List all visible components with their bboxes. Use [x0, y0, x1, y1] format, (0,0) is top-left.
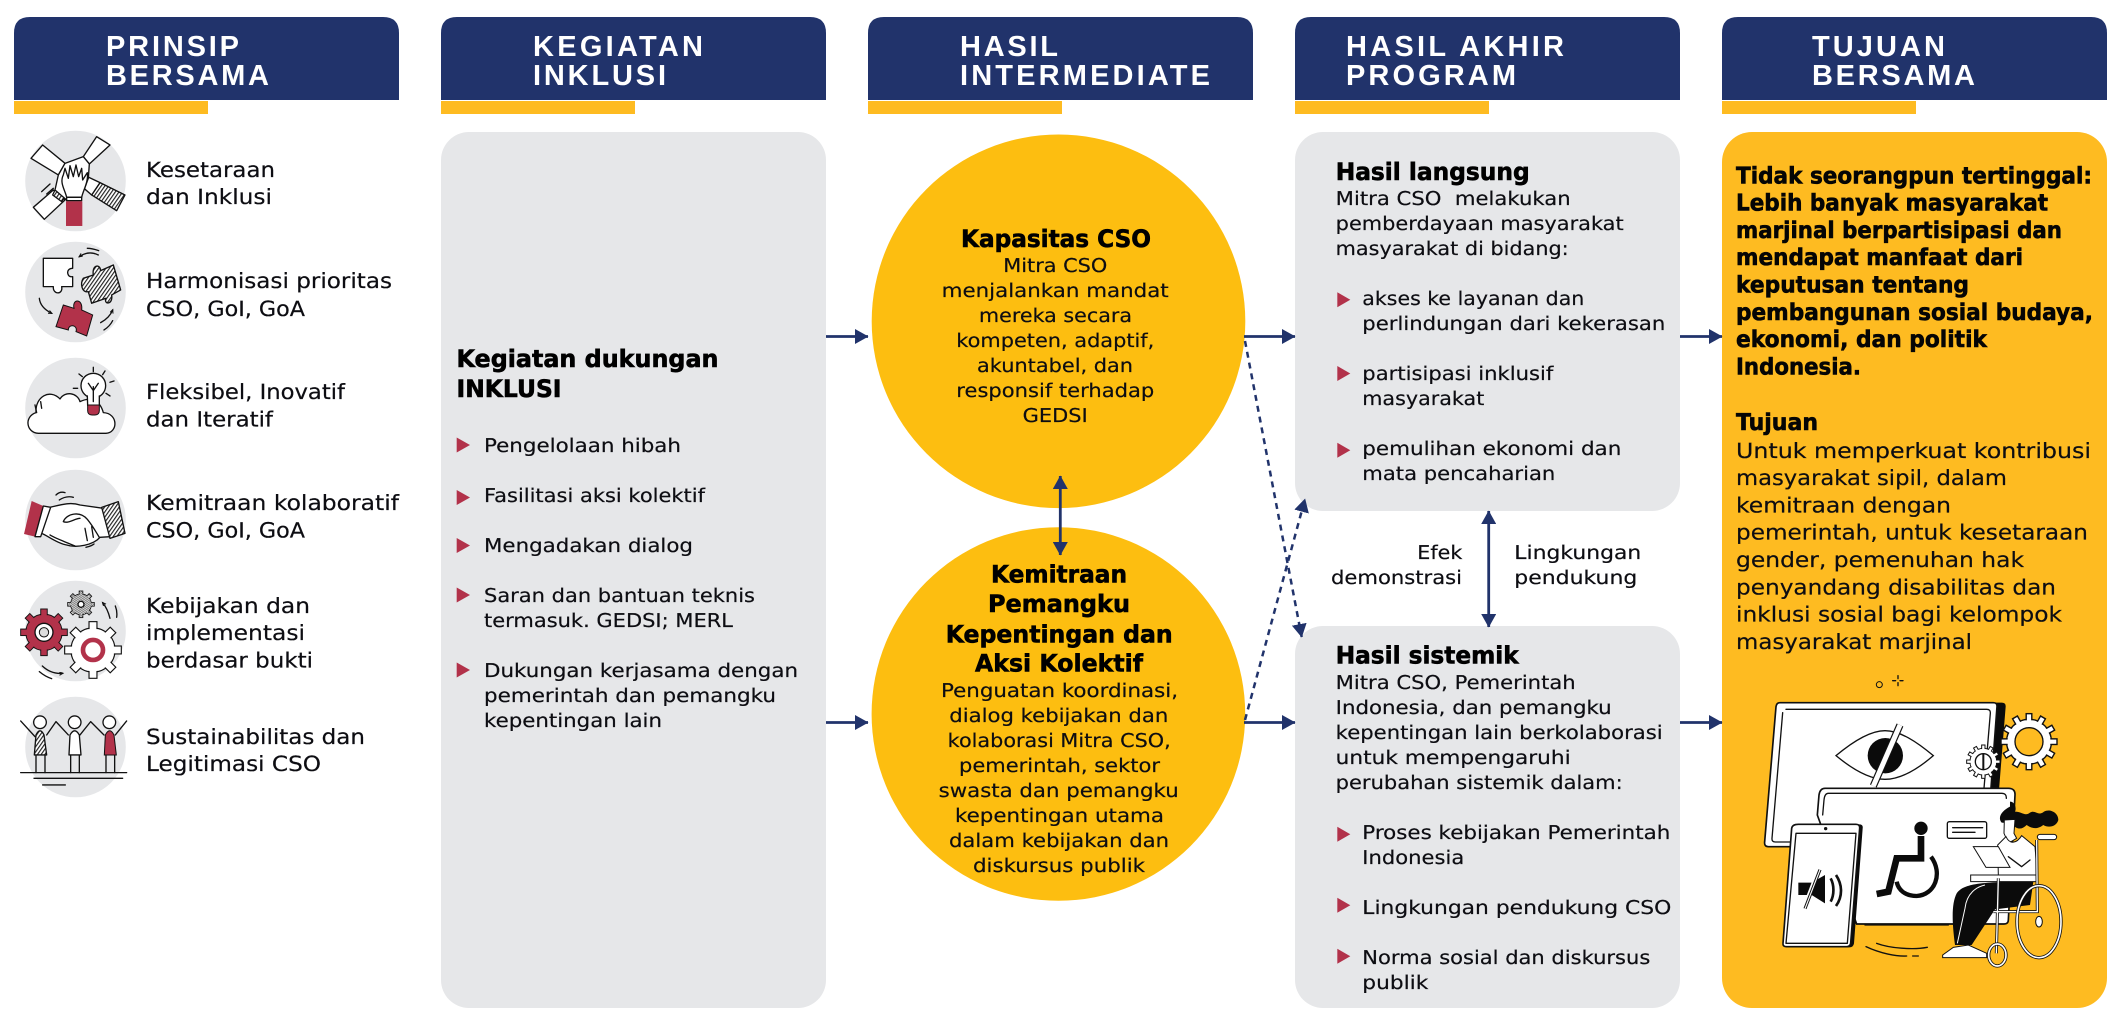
label: Lingkungan pendukung: Lingkungan — [1514, 542, 1641, 564]
panel: circle Kemitraan Pemangku Kepentingan: diskursus publik — [973, 855, 1145, 877]
header: Hasil Intermediate: INTERMEDIATE — [960, 60, 1210, 92]
text: Tidak seorangpun tertinggal: Tidak seorangpun tertinggal: — [1736, 163, 2092, 189]
text: Tidak seorangpun tertinggal: Lebih banyak masyarakat — [1736, 191, 2048, 217]
text: Hasil sistemik intro: Mitra CSO, Pemerintah — [1336, 672, 1576, 694]
illustration: accessibility devices and wheelchair user — [1765, 676, 2061, 966]
header: Hasil Akhir Program — [1295, 17, 1680, 114]
panel: circle Kemitraan Pemangku Kepentingan: dalam kebijakan dan — [949, 830, 1169, 852]
bullet: Saran dan bantuan teknis: termasuk. GEDSI; MERL — [484, 610, 733, 632]
bullet: Lingkungan pendukung CSO: Lingkungan pendukung CSO — [1362, 897, 1671, 919]
label: Efek demonstrasi: demonstrasi — [1331, 567, 1462, 589]
panel: circle Kapasitas CSO: akuntabel, dan — [977, 355, 1133, 377]
header: Prinsip Bersama: BERSAMA — [106, 60, 269, 92]
header: Hasil Intermediate: HASIL — [960, 31, 1058, 63]
panel: circle Kemitraan Pemangku Kepentingan: Pemangku — [988, 590, 1130, 618]
text: Tujuan body: masyarakat sipil, dalam — [1736, 466, 2007, 490]
header: Tujuan Bersama — [1722, 17, 2107, 114]
panel: circle Kapasitas CSO: kompeten, adaptif, — [956, 330, 1154, 352]
bullet: Pengelolaan hibah: Pengelolaan hibah — [484, 435, 681, 457]
icon: people raising hands — [21, 697, 127, 797]
arrow: hasil langsung to tujuan — [1680, 335, 1722, 338]
text: Kesetaraan dan Inklusi: dan Inklusi — [146, 185, 272, 209]
icon: gears — [21, 581, 126, 681]
bullet: Proses kebijakan: Indonesia — [1362, 847, 1464, 869]
panel: circle Kemitraan Pemangku Kepentingan — [872, 527, 1245, 901]
text: Hasil langsung intro: masyarakat di bidang: — [1336, 238, 1569, 260]
text: Harmonisasi prioritas: CSO, GoI, GoA — [146, 297, 306, 321]
label: Lingkungan pendukung: pendukung — [1514, 567, 1637, 589]
header: Prinsip Bersama: PRINSIP — [106, 31, 239, 63]
bullet: Proses kebijakan — [1337, 822, 1670, 869]
bullet: Norma sosial: publik — [1362, 972, 1428, 994]
bullet: akses ke layanan: perlindungan dari kekerasan — [1362, 313, 1665, 335]
bullet: partisipasi inklusif — [1337, 363, 1555, 410]
text: Sustainabilitas dan Legitimasi: Legitimasi CSO — [146, 752, 321, 776]
panel: circle Kapasitas CSO — [872, 134, 1245, 508]
header: Hasil Akhir Program: HASIL AKHIR — [1346, 31, 1564, 63]
bullet: akses ke layanan — [1337, 288, 1665, 335]
label: Efek demonstrasi: Efek — [1417, 542, 1462, 564]
text: Harmonisasi prioritas — [146, 269, 392, 321]
panel: Hasil langsung — [1295, 132, 1680, 511]
icon: puzzle pieces — [25, 242, 126, 342]
text: Tidak seorangpun tertinggal: mendapat manfaat dari — [1736, 245, 2023, 271]
panel: circle Kapasitas CSO: menjalankan mandat — [942, 280, 1169, 302]
text: Tujuan body: penyandang disabilitas dan — [1736, 575, 2056, 599]
arrow: kapasitas to hasil langsung — [1244, 335, 1295, 338]
text: Tidak seorangpun tertinggal: ekonomi, dan politik — [1736, 327, 1988, 353]
panel: prinsip bersama list — [21, 131, 400, 797]
arrow: kegiatan to kemitraan — [826, 721, 868, 724]
panel: circle Kemitraan Pemangku Kepentingan: Kemitraan — [991, 560, 1127, 588]
bullet: Norma sosial: Norma sosial dan diskursus — [1362, 947, 1650, 969]
panel: circle Kemitraan Pemangku Kepentingan: Penguatan koordinasi, — [941, 680, 1178, 702]
panel: circle Kapasitas CSO: Mitra CSO — [1003, 255, 1107, 277]
bullet: partisipasi inklusif: partisipasi inklusif — [1362, 363, 1555, 385]
panel: Hasil sistemik — [1295, 626, 1680, 1008]
heading: Hasil langsung: Hasil langsung — [1336, 158, 1530, 186]
panel: circle Kemitraan Pemangku Kepentingan: pemerintah, sektor — [959, 755, 1160, 777]
text: Kemitraan kolaboratif: Kemitraan kolaboratif — [146, 491, 400, 515]
text: Tujuan body: kemitraan dengan — [1736, 493, 1951, 517]
bullet: Dukungan kerjasama — [457, 660, 798, 732]
text: Tujuan body: gender, pemenuhan hak — [1736, 548, 2025, 572]
text: Tidak seorangpun tertinggal: pembangunan sosial budaya, — [1736, 300, 2093, 326]
bullet: pemulihan ekonomi: pemulihan ekonomi dan — [1362, 438, 1621, 460]
bullet: partisipasi inklusif: masyarakat — [1362, 388, 1484, 410]
text: Tujuan body: Untuk memperkuat kontribusi — [1736, 439, 2091, 463]
arrow: hasil sistemik to tujuan — [1680, 721, 1722, 724]
panel: circle Kemitraan Pemangku Kepentingan: kolaborasi Mitra CSO, — [948, 730, 1171, 752]
text: Hasil sistemik intro — [1336, 672, 1663, 794]
header: Kegiatan Inklusi: INKLUSI — [533, 60, 666, 92]
text: Hasil sistemik intro: perubahan sistemik dalam: — [1336, 772, 1623, 794]
text: Fleksibel, Inovatif: Fleksibel, Inovatif — [146, 380, 346, 404]
arrow: kemitraan to hasil sistemik — [1244, 721, 1295, 724]
text: Kesetaraan dan Inklusi: Kesetaraan — [146, 158, 275, 182]
text: Kebijakan dan implementasi — [146, 594, 313, 672]
text: Kebijakan dan implementasi: berdasar bukti — [146, 648, 313, 672]
panel: circle Kemitraan Pemangku Kepentingan: Aksi Kolektif — [975, 650, 1144, 678]
bullet: Dukungan kerjasama: pemerintah dan pemangku — [484, 685, 776, 707]
bullet: Norma sosial — [1337, 947, 1650, 994]
panel: circle Kapasitas CSO: mereka secara — [979, 305, 1132, 327]
text: Kesetaraan dan Inklusi — [146, 158, 275, 209]
bullet: Proses kebijakan: Proses kebijakan Pemerintah — [1362, 822, 1670, 844]
text: Fleksibel, Inovatif — [146, 380, 346, 432]
header: Kegiatan Inklusi: KEGIATAN — [533, 31, 703, 63]
text: Tujuan body: inklusi sosial bagi kelompok — [1736, 603, 2063, 627]
bullet: akses ke layanan: akses ke layanan dan — [1362, 288, 1584, 310]
text: Tujuan body: masyarakat marjinal — [1736, 630, 1972, 654]
panel: kegiatan dukungan inklusi — [441, 132, 826, 1008]
header: Hasil Intermediate — [868, 17, 1253, 114]
bullet: Saran dan bantuan teknis — [457, 585, 755, 632]
header: Kegiatan Inklusi — [441, 17, 826, 114]
text: Hasil sistemik intro: kepentingan lain berkolaborasi — [1336, 722, 1663, 744]
label: Lingkungan pendukung — [1514, 542, 1641, 589]
text: Kebijakan dan implementasi: Kebijakan dan — [146, 594, 310, 618]
text: Sustainabilitas dan Legitimasi — [146, 725, 365, 776]
arrow: dashed kemitraan to hasil langsung — [1245, 499, 1305, 720]
header: Tujuan Bersama: TUJUAN — [1812, 31, 1945, 63]
text: Tidak seorangpun tertinggal: Indonesia. — [1736, 354, 1861, 380]
panel: circle Kemitraan Pemangku Kepentingan: dialog kebijakan dan — [949, 705, 1168, 727]
text: Kebijakan dan implementasi: implementasi — [146, 621, 305, 645]
icon: cloud and lightbulb — [25, 358, 126, 458]
panel: circle Kapasitas CSO: responsif terhadap — [956, 380, 1154, 402]
arrow: dashed kapasitas to hasil sistemik — [1245, 341, 1302, 637]
heading: Kegiatan dukungan INKLUSI: Kegiatan dukungan — [456, 345, 718, 373]
icon: joined hands — [25, 131, 126, 231]
bullet: Saran dan bantuan teknis: Saran dan bantuan teknis — [484, 585, 755, 607]
text: Hasil langsung intro: Mitra CSO melakukan — [1336, 188, 1571, 210]
text: Hasil sistemik intro: untuk mempengaruhi — [1336, 747, 1571, 769]
panel: circle Kemitraan Pemangku Kepentingan: kepentingan utama — [955, 805, 1164, 827]
label: Efek demonstrasi — [1331, 542, 1462, 589]
arrow: hasil langsung and hasil sistemik two-way — [1487, 511, 1490, 627]
bullet: Mengadakan dialog: Mengadakan dialog — [484, 535, 693, 557]
text: Hasil sistemik intro: Indonesia, dan pemangku — [1336, 697, 1612, 719]
text: Fleksibel, Inovatif: dan Iteratif — [146, 408, 274, 432]
bullet: Fasilitasi aksi kolektif: Fasilitasi aksi kolektif — [484, 485, 706, 507]
arrow: kegiatan to kapasitas — [826, 335, 868, 338]
panel: circle Kapasitas CSO: GEDSI — [1023, 405, 1088, 427]
heading: Kegiatan dukungan INKLUSI: INKLUSI — [456, 375, 562, 403]
panel: circle Kemitraan Pemangku Kepentingan: swasta dan pemangku — [939, 780, 1179, 802]
text: Kemitraan kolaboratif: CSO, GoI, GoA — [146, 518, 306, 542]
text: Harmonisasi prioritas: Harmonisasi prioritas — [146, 269, 392, 293]
bullet: pemulihan ekonomi — [1337, 438, 1621, 485]
text: Kemitraan kolaboratif — [146, 491, 400, 542]
heading: Hasil sistemik: Hasil sistemik — [1336, 642, 1520, 670]
bullet: Dukungan kerjasama: Dukungan kerjasama dengan — [484, 660, 798, 682]
icon: handshake — [24, 470, 126, 570]
text: Tujuan body — [1736, 439, 2091, 654]
header: Prinsip Bersama — [14, 17, 399, 114]
bullet: Dukungan kerjasama: kepentingan lain — [484, 710, 662, 732]
bullet: pemulihan ekonomi: mata pencaharian — [1362, 463, 1555, 485]
heading: Tujuan: Tujuan — [1736, 410, 1818, 436]
header: Hasil Akhir Program: PROGRAM — [1346, 60, 1516, 92]
text: Tidak seorangpun tertinggal — [1736, 163, 2093, 380]
header: Tujuan Bersama: BERSAMA — [1812, 60, 1975, 92]
text: Tidak seorangpun tertinggal: marjinal berpartisipasi dan — [1736, 218, 2062, 244]
text: Sustainabilitas dan Legitimasi: Sustainabilitas dan — [146, 725, 365, 749]
panel: Tujuan Bersama — [1722, 132, 2107, 1008]
panel: circle Kemitraan Pemangku Kepentingan: Kepentingan dan — [946, 620, 1173, 648]
arrow: kapasitas and kemitraan two-way — [1059, 476, 1062, 555]
panel: circle Kapasitas CSO: Kapasitas CSO — [961, 225, 1151, 253]
heading: Kegiatan dukungan INKLUSI — [456, 345, 718, 403]
text: Hasil langsung intro: pemberdayaan masyarakat — [1336, 213, 1624, 235]
text: Tujuan body: pemerintah, untuk kesetaraan — [1736, 521, 2088, 545]
text: Tidak seorangpun tertinggal: keputusan tentang — [1736, 272, 1969, 298]
text: Hasil langsung intro — [1336, 188, 1624, 260]
